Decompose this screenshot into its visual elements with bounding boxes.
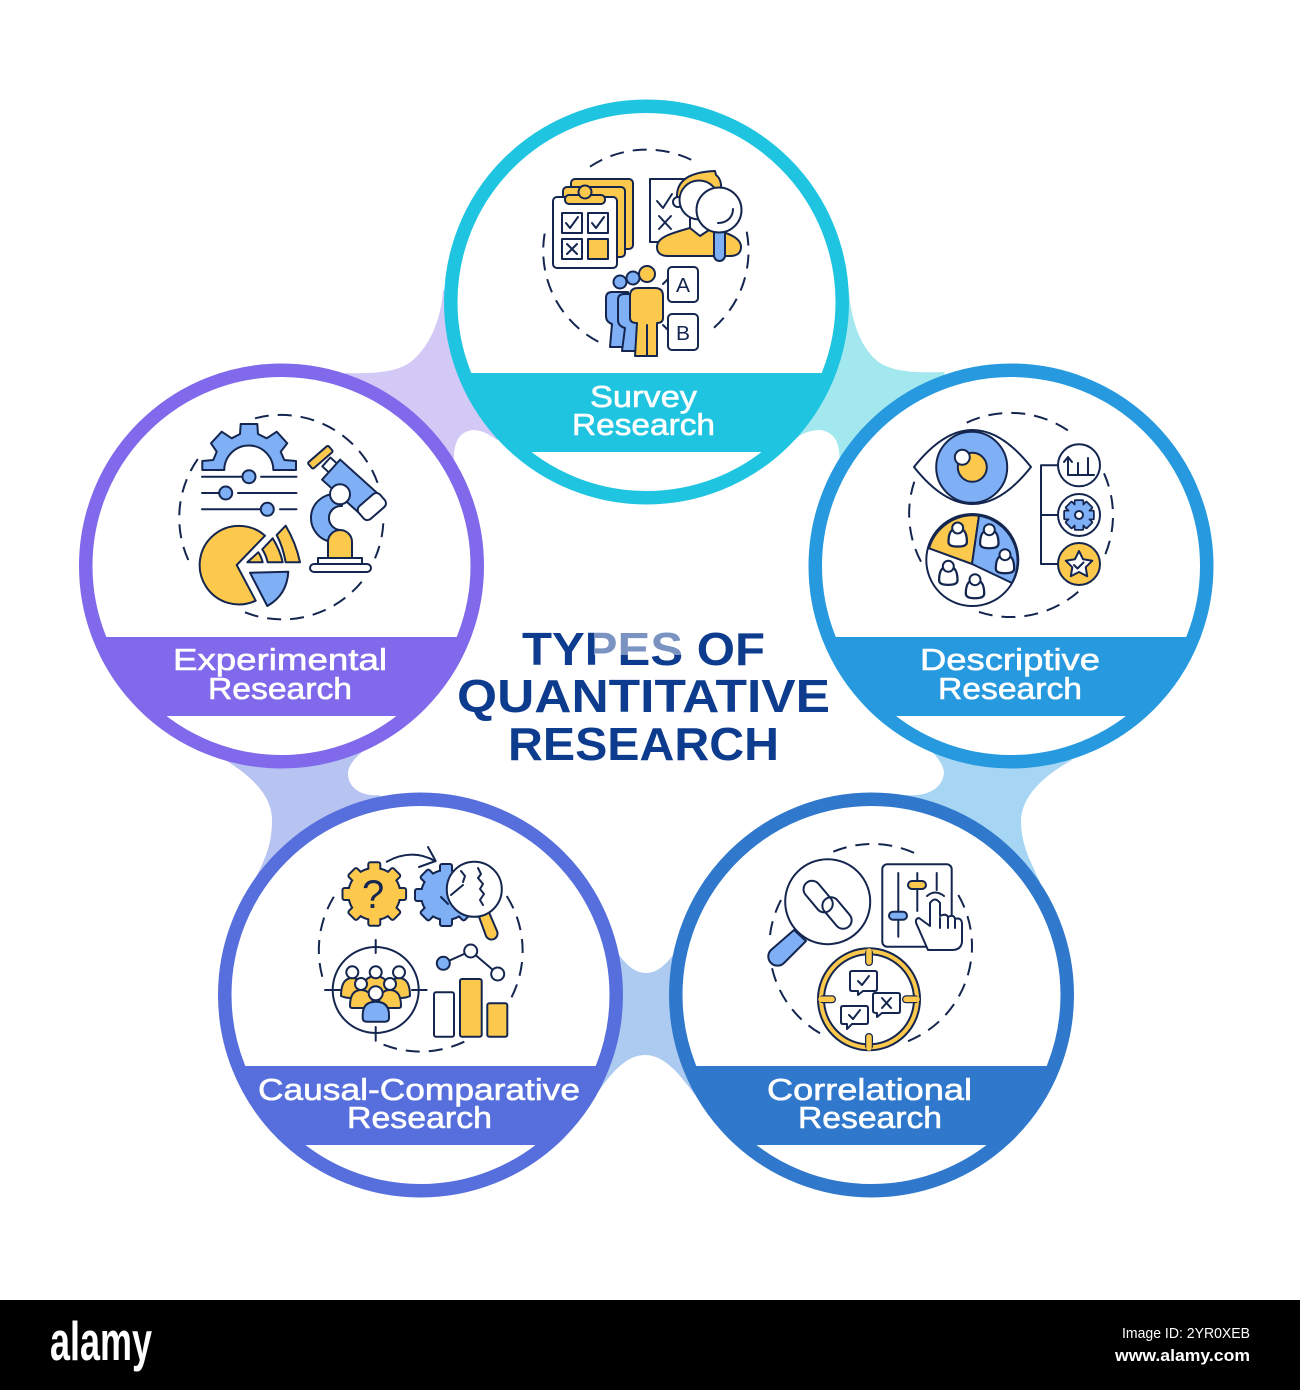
label: Research [798, 1100, 942, 1135]
connector: experimental to causal-comparative [225, 700, 380, 900]
label: Correlational [767, 1072, 972, 1107]
label band [244, 1066, 597, 1145]
connector: causal-comparative to correlational [560, 945, 720, 1095]
label [920, 642, 1100, 706]
dashed icon ring [770, 844, 972, 1042]
dashed icon ring [179, 415, 383, 619]
icon: clipboards with checkboxes [553, 179, 633, 268]
label: Survey [590, 379, 698, 414]
footer logo: alamy [50, 1310, 152, 1372]
connector: survey to experimental [345, 290, 560, 500]
panel: causal-comparative research [225, 799, 616, 1191]
ring [86, 370, 477, 762]
icon: eye [914, 430, 1031, 504]
icon: arrow [387, 847, 436, 867]
label: Research [938, 671, 1082, 706]
label band [835, 637, 1187, 716]
icon: pie chart [200, 526, 300, 606]
ring [451, 106, 842, 498]
label: Experimental [173, 642, 387, 677]
icon: question gear [344, 863, 405, 925]
icon: targeted crowd [325, 940, 427, 1041]
answer letters: A [676, 275, 691, 297]
icon: microscope [308, 445, 388, 572]
dashed icon ring [319, 896, 523, 1052]
label: Research [572, 407, 715, 442]
dashed icon ring [543, 150, 749, 342]
ring [815, 370, 1207, 762]
label: Causal-Comparative [258, 1072, 580, 1107]
label band [470, 373, 823, 452]
answer letters: B [676, 323, 690, 345]
icon: three-item tree [1041, 444, 1100, 585]
icon: group choosing A or B [606, 266, 698, 356]
title: TYPES OF [522, 623, 765, 675]
dashed icon ring [909, 413, 1113, 617]
panel: descriptive research [815, 370, 1207, 762]
label: Research [208, 671, 352, 706]
label [258, 1072, 580, 1135]
panel: experimental research [86, 370, 477, 762]
ring [676, 799, 1067, 1191]
label: Descriptive [920, 642, 1100, 677]
image id: Image ID: 2YR0XEB [1122, 1325, 1250, 1342]
panel: correlational research [676, 799, 1067, 1191]
icon: magnifier [447, 862, 502, 940]
icon: respondent with magnifier [650, 171, 742, 261]
icon: question gear: ? [362, 873, 384, 917]
icon: control panel with hand [882, 864, 962, 950]
label: Research [347, 1100, 492, 1135]
title: RESEARCH [508, 718, 779, 770]
icon: half gear [202, 424, 296, 470]
answer letters [676, 275, 691, 345]
website: www.alamy.com [1114, 1346, 1250, 1365]
icon: bars and line chart [434, 944, 507, 1037]
label [173, 642, 387, 706]
connector: descriptive to correlational [905, 700, 1072, 900]
title [457, 623, 830, 770]
connectors between circles [225, 290, 1072, 1095]
label band [105, 637, 458, 716]
title: QUANTITATIVE [457, 670, 830, 722]
icon: yellow target with chat bubbles [818, 948, 920, 1050]
connector: survey to descriptive [700, 292, 945, 480]
footer bar [0, 1300, 1300, 1390]
label [767, 1072, 972, 1135]
icon: magnifier with chain link [768, 859, 870, 966]
panel: survey research [451, 106, 842, 498]
icon: blue gear under magnifier [416, 865, 476, 925]
label band [695, 1066, 1048, 1145]
label [572, 379, 715, 442]
icon: sliders [202, 470, 296, 516]
icon: segmented population pie [926, 514, 1018, 606]
ring [225, 799, 616, 1191]
